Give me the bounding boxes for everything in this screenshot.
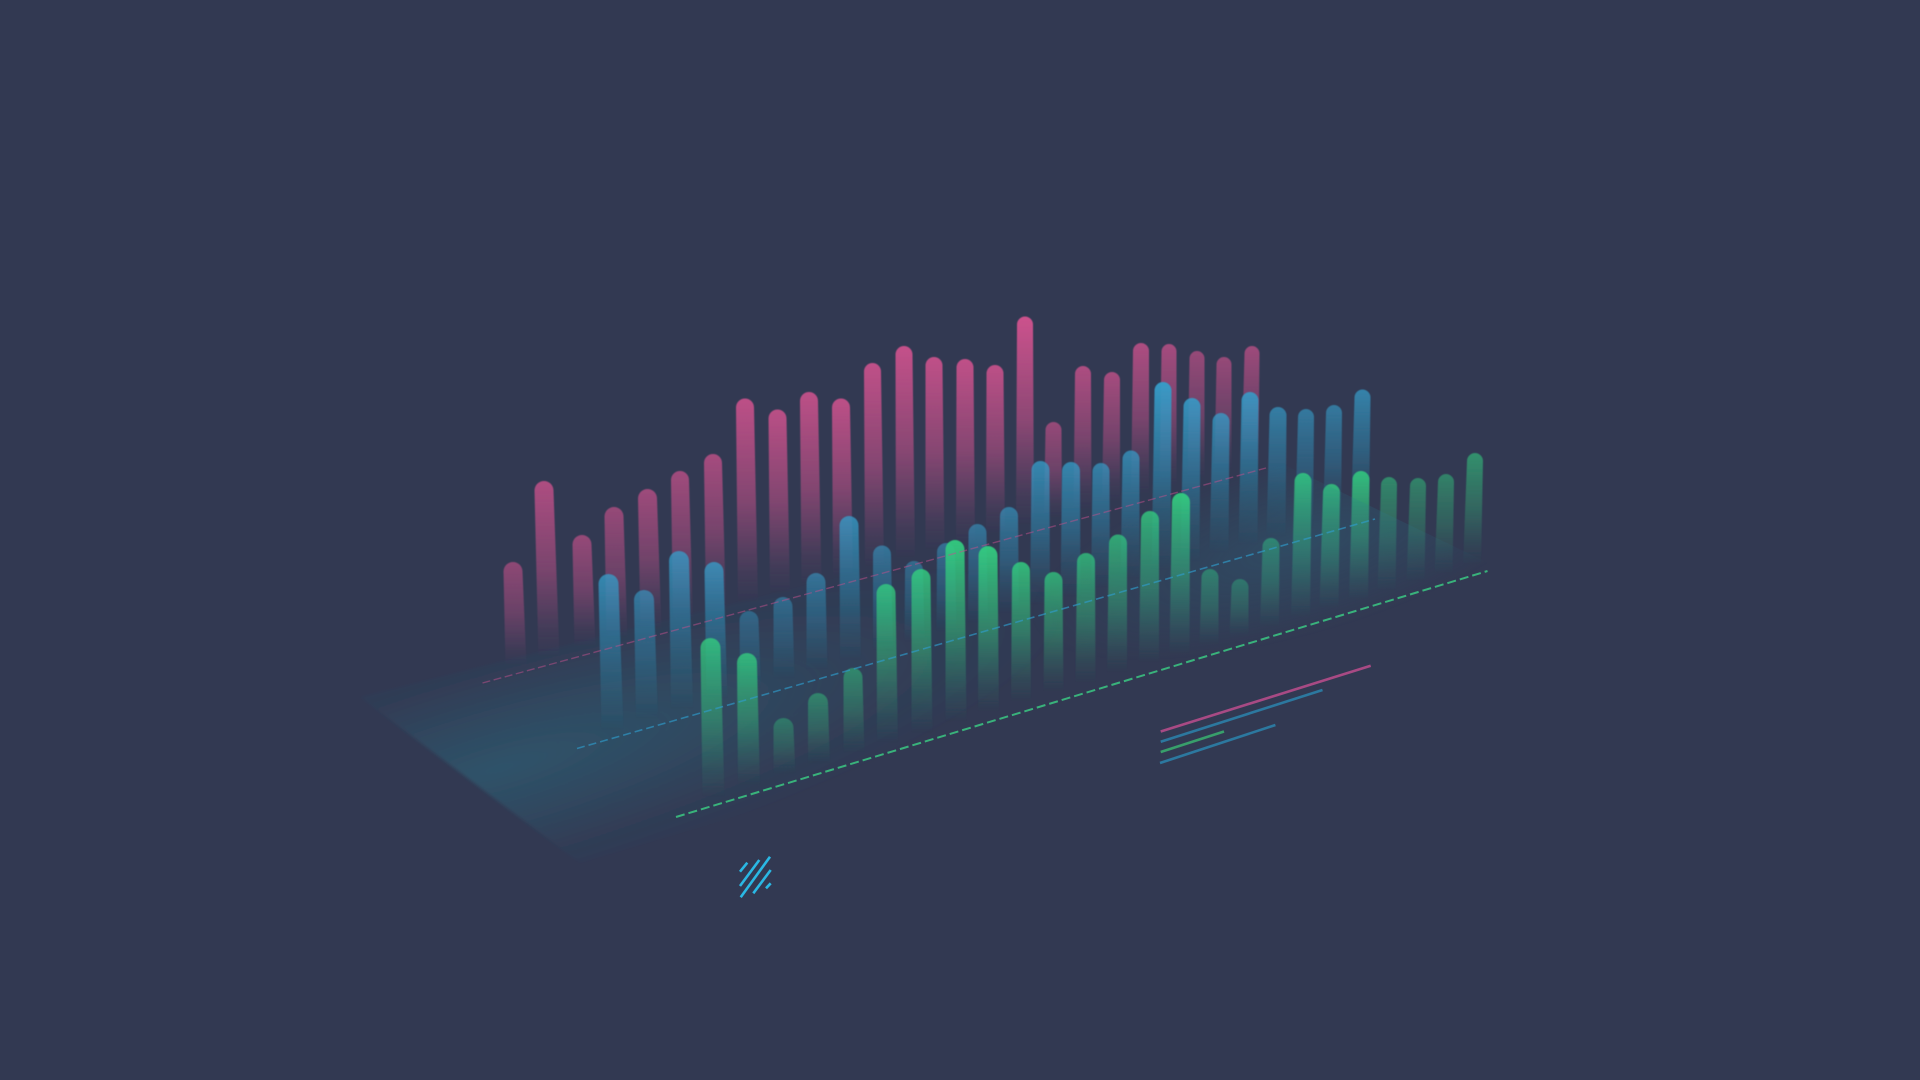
floor plane: bright left glow: [360, 465, 1528, 863]
floor plane: faint right tint over bars: [360, 465, 1528, 863]
blue bar row: [598, 382, 1370, 730]
legend lines: [1160, 666, 1371, 763]
green bar row: [700, 453, 1483, 797]
pink bar row: [504, 316, 1260, 666]
icon: hatched square: [740, 857, 771, 897]
dashed baseline: blue row: [577, 519, 1375, 748]
dashed baseline: pink row: [482, 468, 1266, 683]
dashed baseline: green row: [676, 571, 1488, 817]
